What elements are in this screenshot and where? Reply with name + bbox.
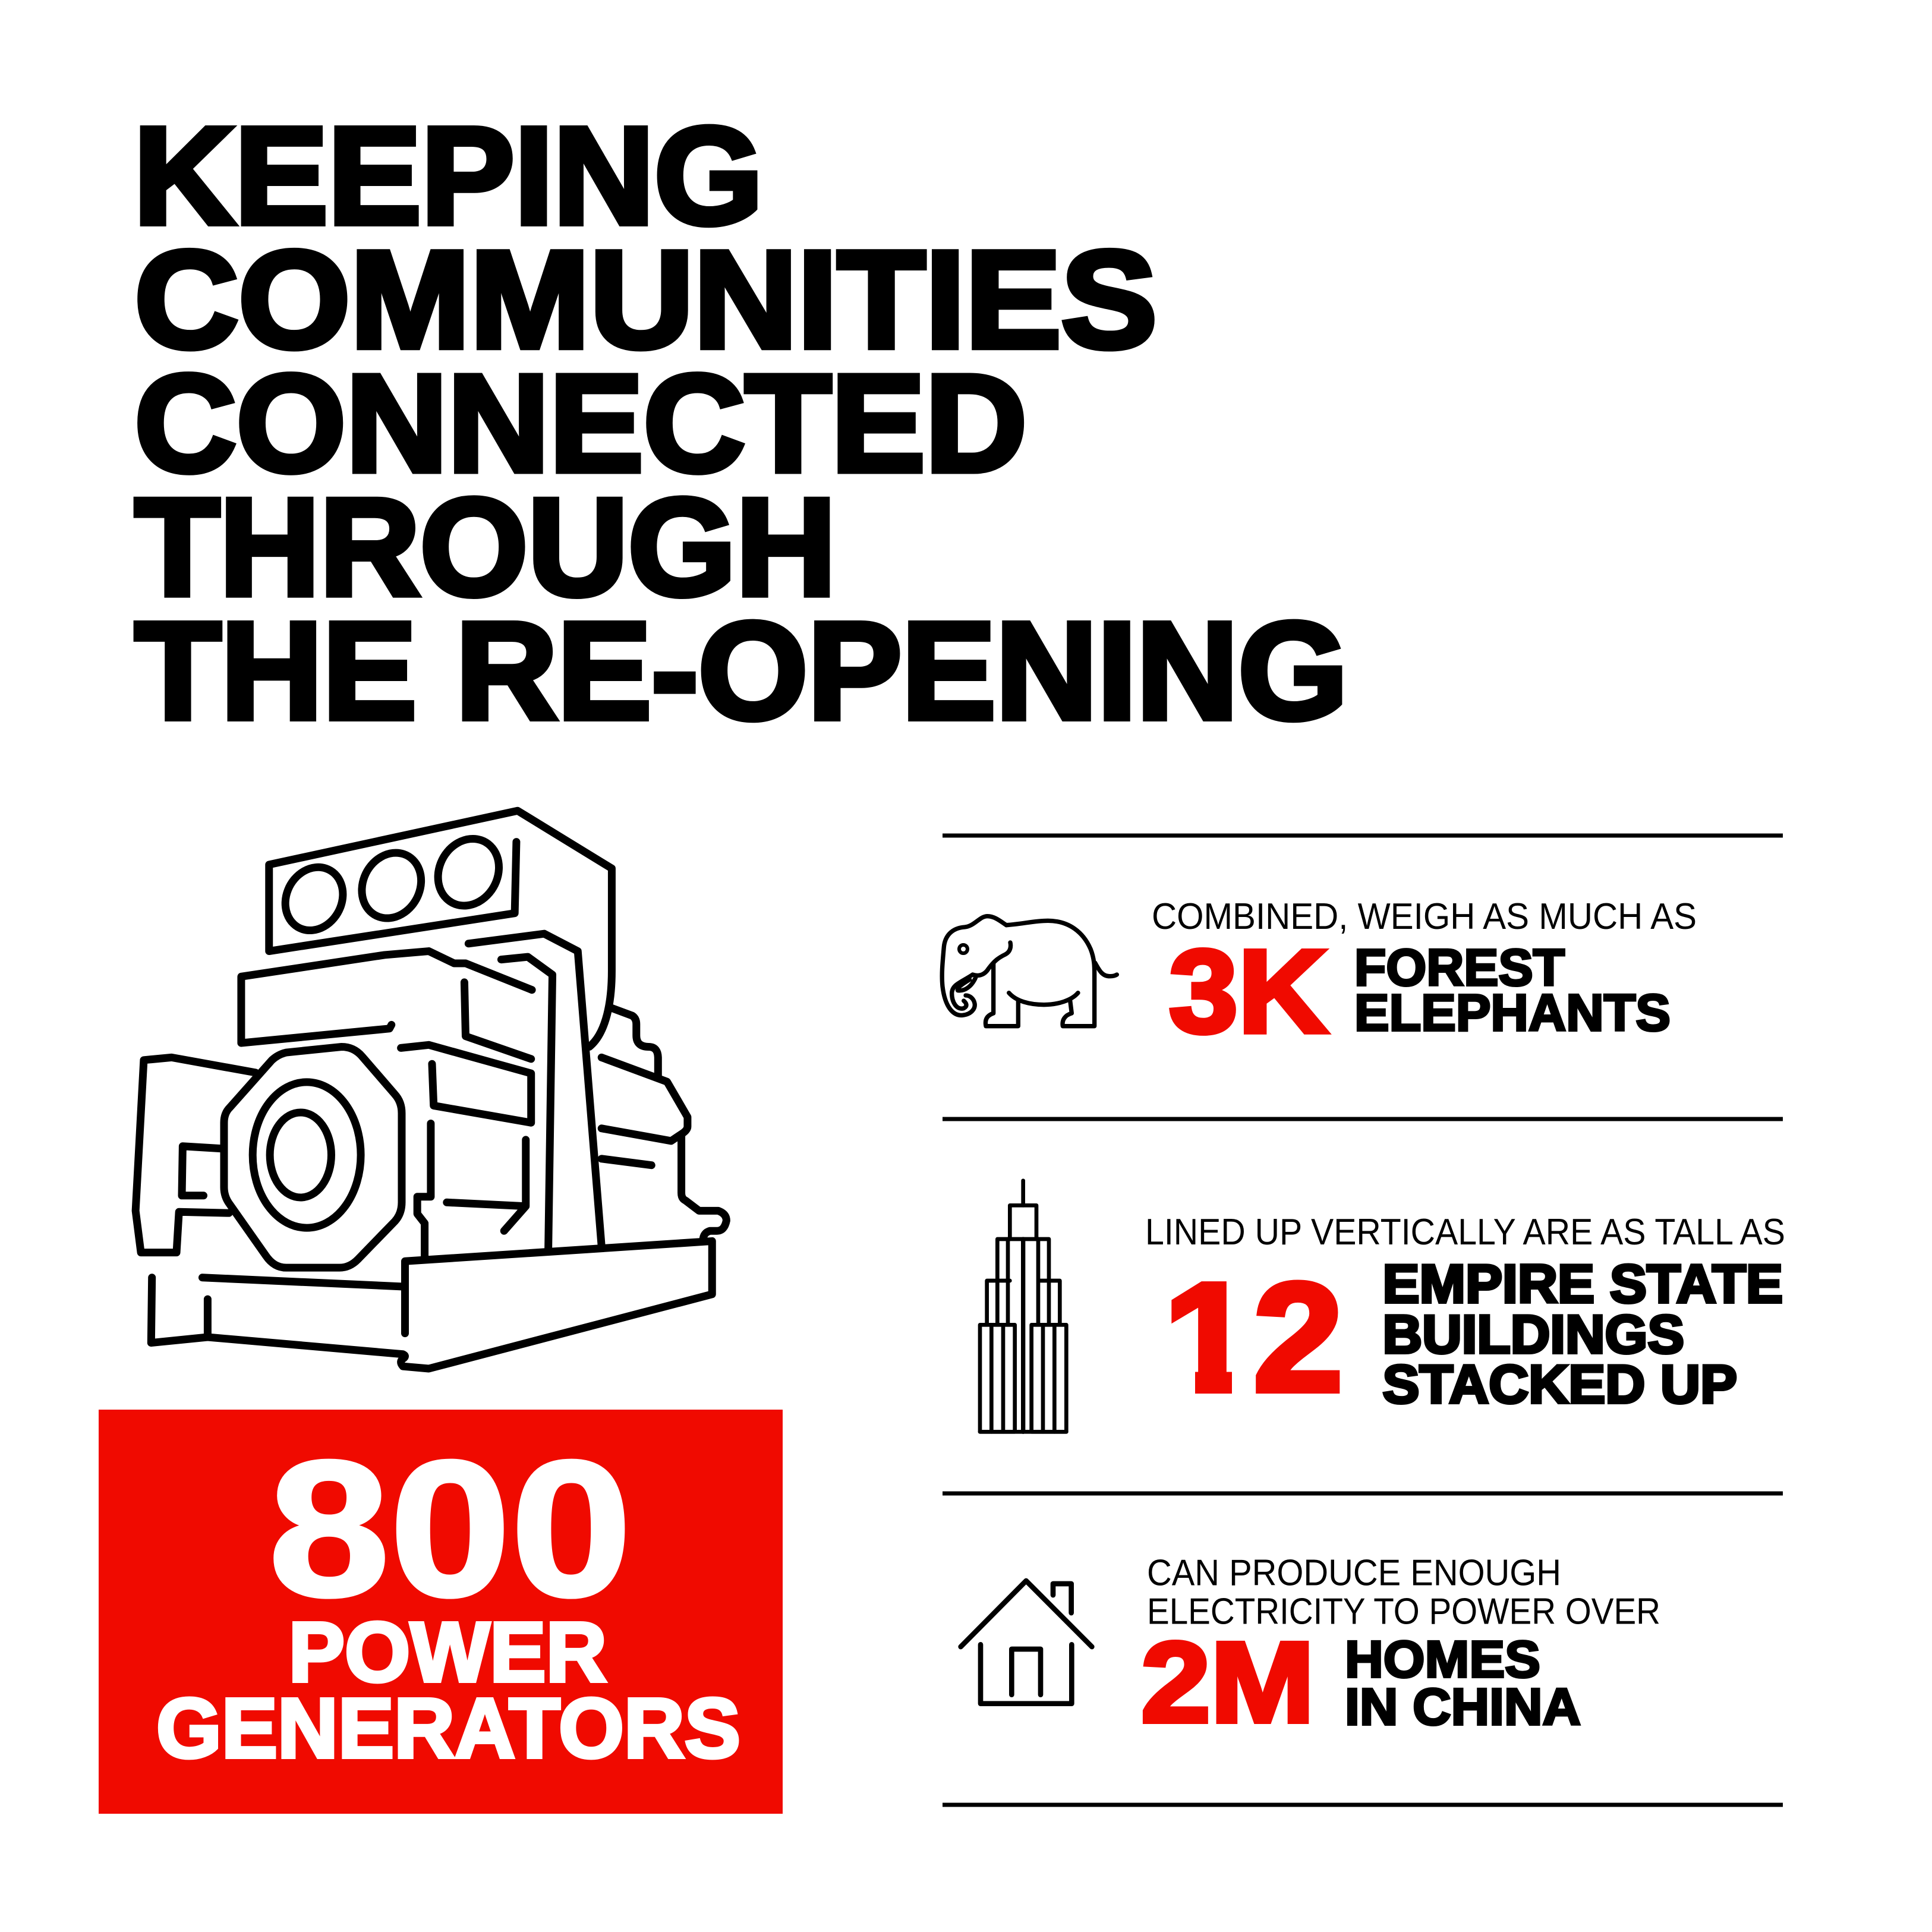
title (134, 99, 1348, 748)
panel: empire state stat (980, 1181, 1785, 1432)
label: empire state buildings: EMPIRE STATE (1382, 1254, 1783, 1315)
big number 800: 800 (269, 1420, 632, 1637)
label: homes in china (1345, 1631, 1581, 1736)
title: CONNECTED (134, 347, 1027, 500)
label: homes in china: HOMES (1345, 1631, 1540, 1688)
title: THROUGH (135, 471, 836, 625)
number: 2M: 2M (1141, 1618, 1315, 1746)
text: lined up: LINED UP VERTICALLY ARE AS TALL AS (1145, 1212, 1785, 1253)
label: forest elephants: ELEPHANTS (1354, 984, 1671, 1042)
label: homes in china: IN CHINA (1345, 1678, 1581, 1736)
label: power generators (156, 1605, 740, 1776)
title: KEEPING (134, 99, 763, 253)
label: power generators: POWER (289, 1605, 607, 1700)
label: empire state buildings: STACKED UP (1382, 1355, 1737, 1414)
icon: skyscraper (980, 1181, 1066, 1432)
text: can produce (1147, 1553, 1660, 1632)
panel: homes stat (961, 1553, 1660, 1746)
label: empire state buildings (1382, 1254, 1783, 1414)
text: can produce: ELECTRICITY TO POWER OVER (1147, 1591, 1660, 1632)
panel: elephants stat (942, 896, 1697, 1058)
label: empire state buildings: BUILDINGS (1382, 1305, 1684, 1364)
icon: elephant (942, 916, 1117, 1026)
number: 3K: 3K (1169, 926, 1328, 1058)
divider lines (943, 833, 1783, 1807)
title: COMMUNITIES (134, 223, 1157, 377)
label: power generators: GENERATORS (156, 1681, 740, 1776)
panel: 800 power generators (99, 1410, 783, 1814)
number: 12: 12 (1164, 1252, 1343, 1424)
text: combined weigh: COMBINED, WEIGH AS MUCH AS (1152, 896, 1697, 937)
icon: house (961, 1581, 1092, 1704)
icon: power generator (135, 811, 726, 1369)
label: forest elephants: FOREST (1354, 939, 1565, 997)
label: forest elephants (1354, 939, 1671, 1042)
title: THE RE-OPENING (135, 594, 1348, 748)
text: can produce: CAN PRODUCE ENOUGH (1147, 1553, 1561, 1594)
